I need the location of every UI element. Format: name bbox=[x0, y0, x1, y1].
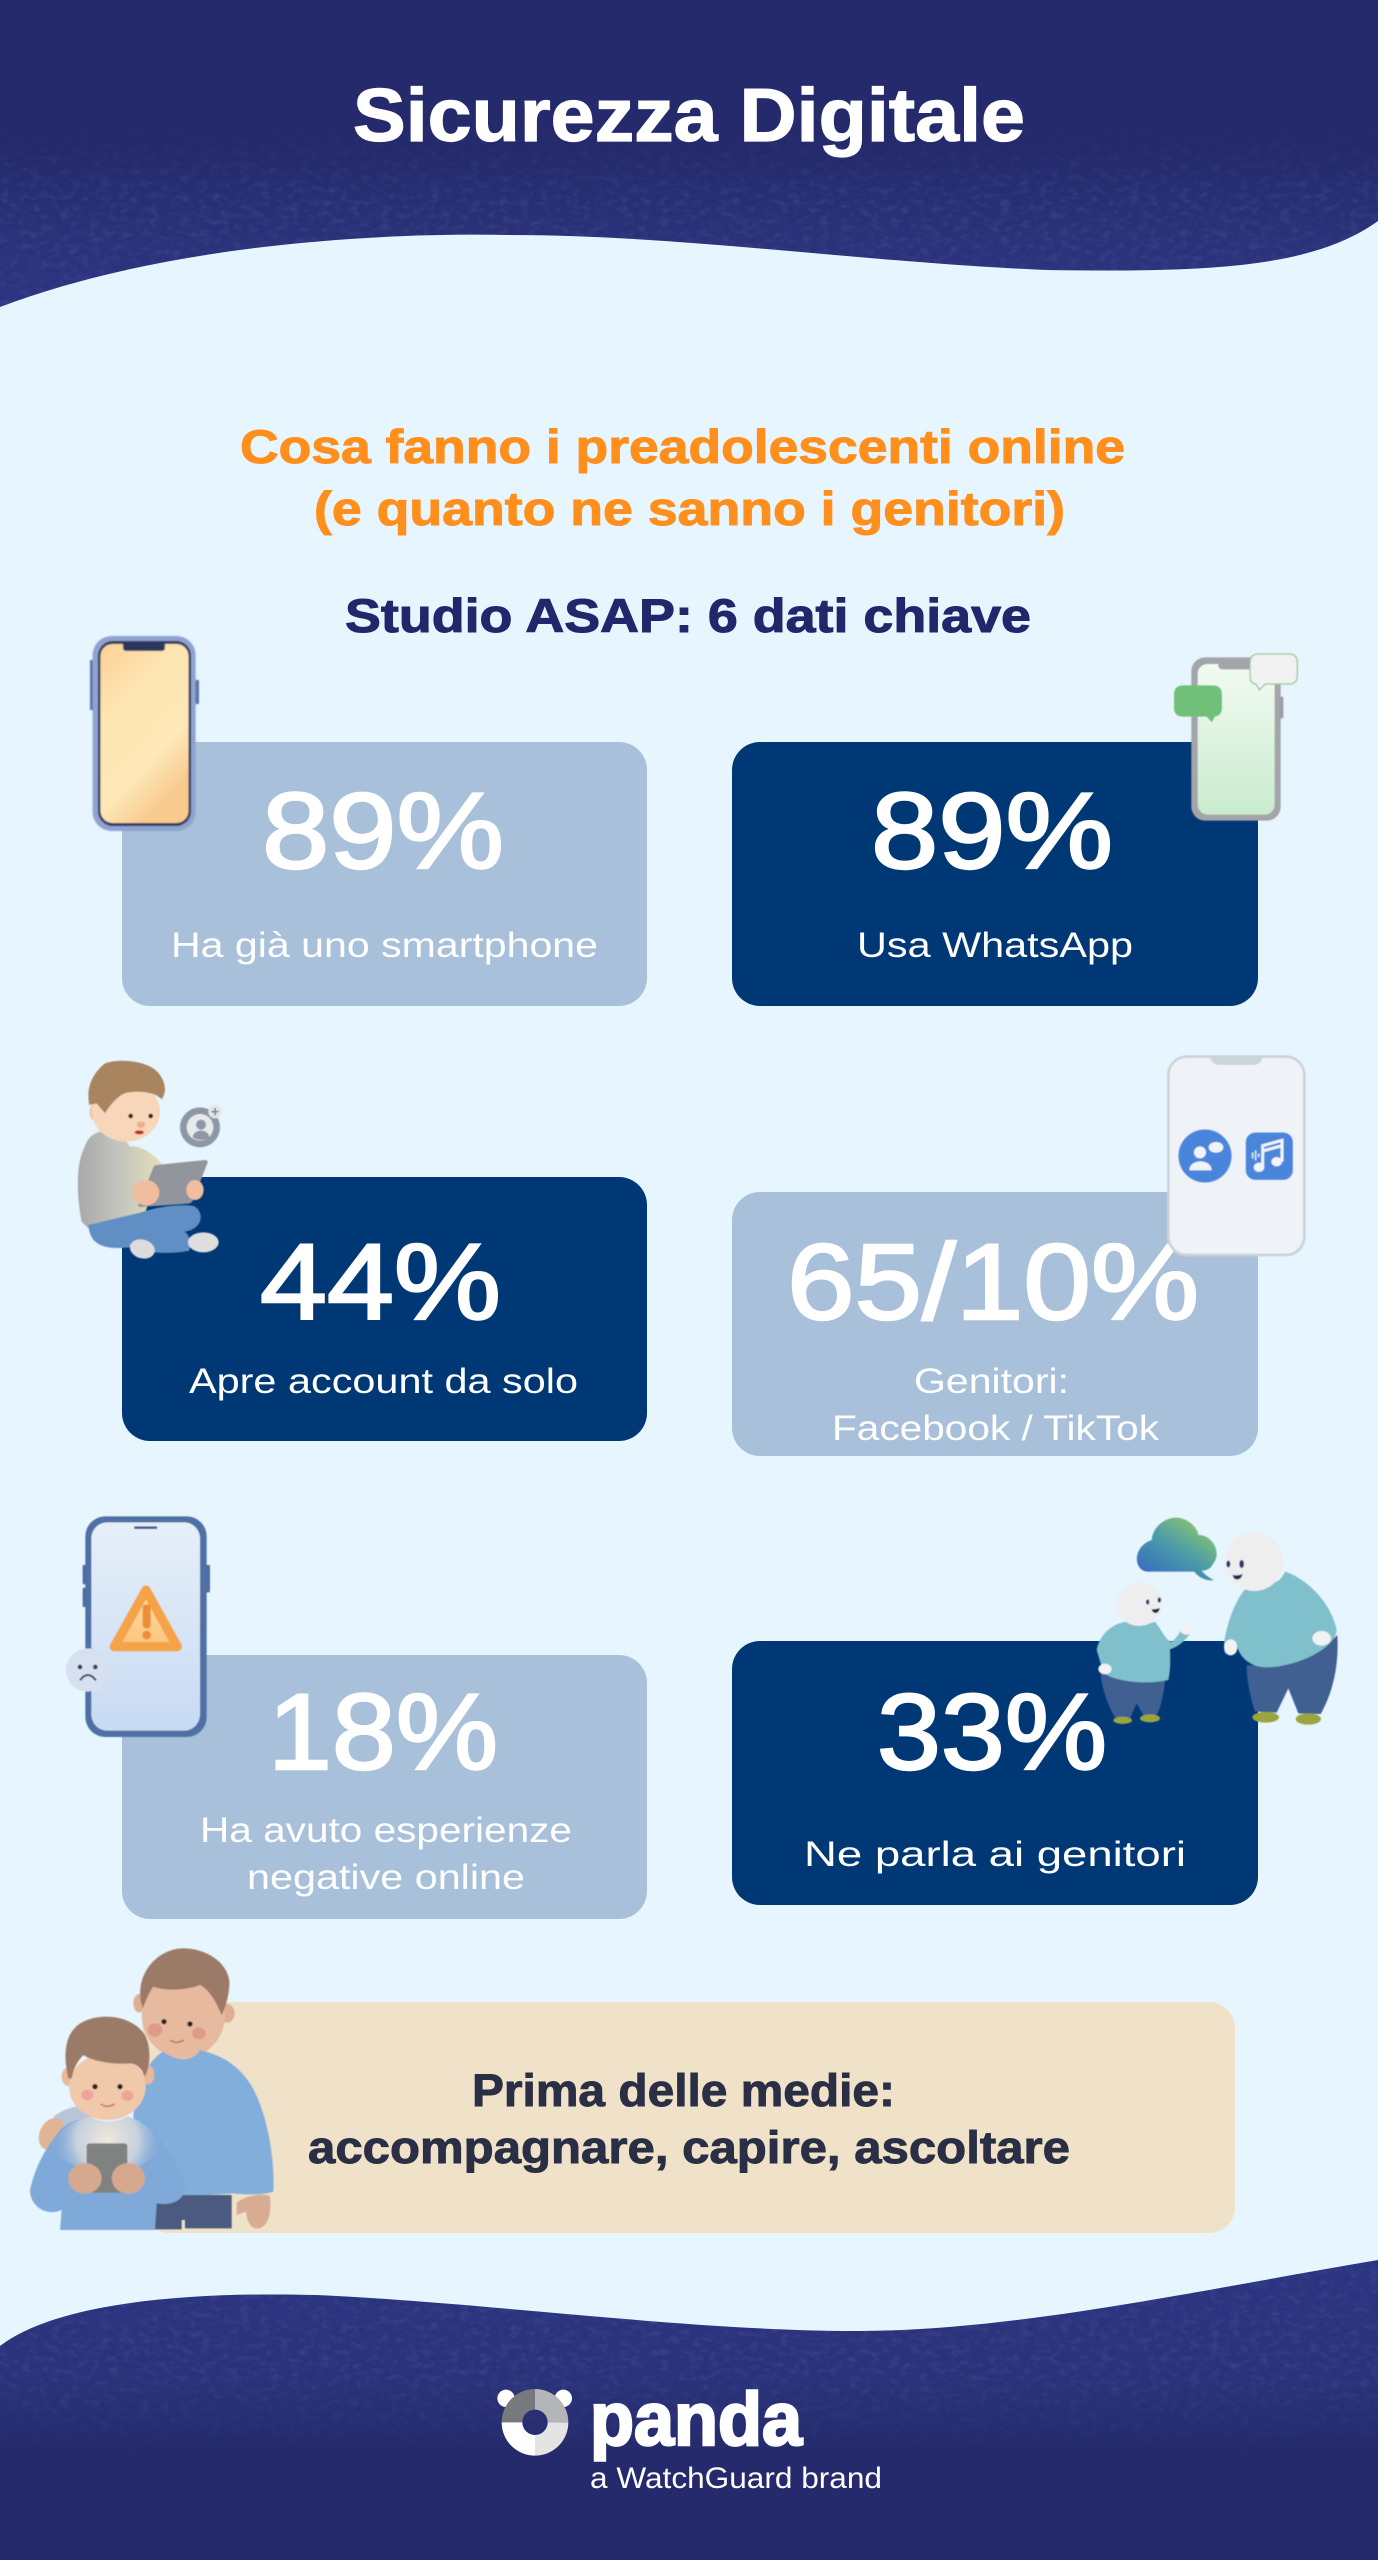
hands bbox=[133, 1180, 159, 1205]
adult hand bbox=[237, 2195, 270, 2228]
warning triangle bbox=[114, 1590, 177, 1647]
stat label: Ha avuto esperienze bbox=[200, 1811, 572, 1850]
stat value: 89% bbox=[871, 770, 1113, 891]
footer wave banner bbox=[0, 2260, 1378, 2560]
adult trousers bbox=[155, 2195, 232, 2229]
logo: panda bbox=[497, 2378, 882, 2495]
white bubble bbox=[1250, 654, 1297, 690]
stat label: Ha già uno smartphone bbox=[171, 926, 598, 965]
stat value: 89% bbox=[262, 770, 504, 891]
panel: 65/10% parents bbox=[732, 1192, 1258, 1456]
closing text bbox=[308, 2065, 1070, 2173]
hoodie bbox=[78, 1131, 162, 1228]
panel: 33% talks to parents bbox=[732, 1641, 1258, 1905]
head bbox=[89, 1103, 104, 1122]
icon: smartphone bbox=[90, 636, 199, 831]
icon: parent and child with phone bbox=[30, 1948, 274, 2230]
panel: 18% negative experiences: negative online bbox=[247, 1858, 525, 1897]
logo tagline: a WatchGuard brand bbox=[590, 2462, 882, 2495]
child sweater bbox=[30, 2117, 185, 2230]
add-user badge bbox=[180, 1107, 220, 1147]
stat label: Usa WhatsApp bbox=[857, 926, 1133, 965]
stat value: 18% bbox=[268, 1671, 498, 1792]
heading: study: Studio ASAP: 6 dati chiave bbox=[345, 589, 1031, 642]
speech cloud bbox=[1137, 1518, 1217, 1580]
stat label: Ne parla ai genitori bbox=[804, 1835, 1186, 1874]
panel: 44% account bbox=[122, 1177, 647, 1441]
child head bbox=[62, 2067, 75, 2086]
panel: 89% WhatsApp bbox=[732, 742, 1258, 1006]
icon: boy with tablet bbox=[78, 1061, 222, 1261]
stat label: Apre account da solo bbox=[189, 1362, 578, 1401]
green bubble bbox=[1174, 685, 1222, 722]
music app bbox=[1246, 1132, 1293, 1180]
arm on shoulder bbox=[53, 2105, 97, 2137]
socks bbox=[128, 1237, 157, 1261]
adult figure bbox=[1247, 1635, 1338, 1714]
logo wordmark: panda bbox=[590, 2378, 802, 2462]
child figure bbox=[1101, 1673, 1165, 1718]
icon: phone with apps bbox=[1168, 1057, 1304, 1255]
child hands bbox=[68, 2163, 102, 2194]
stat label: Genitori: bbox=[914, 1362, 1069, 1401]
panel: closing message bbox=[143, 2002, 1235, 2233]
closing text: Prima delle medie: bbox=[472, 2065, 895, 2116]
title: Sicurezza Digitale bbox=[353, 73, 1025, 157]
panel: 65/10% parents: Facebook / TikTok bbox=[832, 1409, 1160, 1448]
header wave banner bbox=[0, 0, 1378, 310]
stat value: 33% bbox=[877, 1671, 1107, 1792]
jeans bbox=[88, 1205, 201, 1253]
logo mark bbox=[497, 2389, 572, 2456]
icon: two figures talking bbox=[1097, 1518, 1338, 1725]
stat value: 44% bbox=[260, 1221, 501, 1342]
sad face bbox=[66, 1648, 109, 1692]
panel: 18% negative experiences bbox=[122, 1655, 647, 1919]
adult head bbox=[133, 1994, 145, 2013]
closing text: accompagnare, capire, ascoltare bbox=[308, 2122, 1070, 2173]
panel: 89% smartphone bbox=[122, 742, 647, 1006]
tablet bbox=[138, 1160, 208, 1207]
stat value: 65/10% bbox=[787, 1221, 1199, 1342]
community app bbox=[1178, 1129, 1232, 1183]
icon: warning phone bbox=[66, 1516, 210, 1737]
icon: messaging phone bbox=[1174, 654, 1297, 821]
heading: subtitle bbox=[240, 420, 1125, 535]
child phone bbox=[87, 2143, 127, 2193]
heading: subtitle: Cosa fanno i preadolescenti online bbox=[240, 420, 1125, 473]
adult sweater bbox=[133, 2050, 274, 2197]
heading: subtitle: (e quanto ne sanno i genitori) bbox=[314, 482, 1065, 535]
